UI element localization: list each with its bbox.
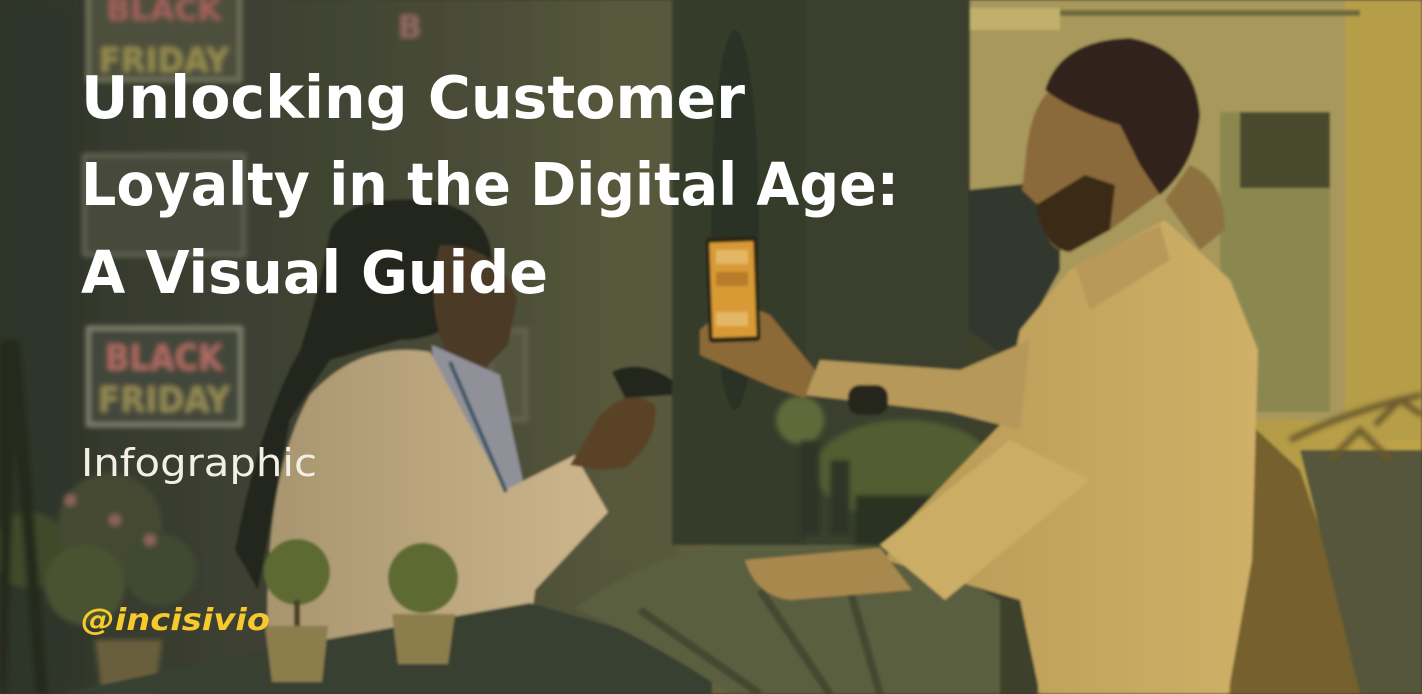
small potted plants <box>264 539 458 682</box>
black friday signs: FRIDAY <box>99 41 229 81</box>
title <box>81 63 899 307</box>
man holding phone <box>700 38 1422 694</box>
hangers on the right <box>1290 395 1422 460</box>
title: Loyalty in the Digital Age: <box>81 150 899 219</box>
counter <box>60 545 1000 694</box>
subtitle: Infographic <box>81 441 317 485</box>
black friday signs: BLACK <box>105 338 224 379</box>
handle: @incisivio <box>81 603 270 638</box>
black friday signs: FRIDAY <box>98 380 231 421</box>
title: A Visual Guide <box>81 238 548 307</box>
plants on the left <box>0 340 196 694</box>
phone <box>705 236 761 343</box>
black friday signs <box>84 0 526 425</box>
title: Unlocking Customer <box>81 63 745 132</box>
plant behind counter <box>776 396 995 545</box>
black friday signs: B <box>398 8 422 46</box>
woman with scanner <box>235 199 672 650</box>
